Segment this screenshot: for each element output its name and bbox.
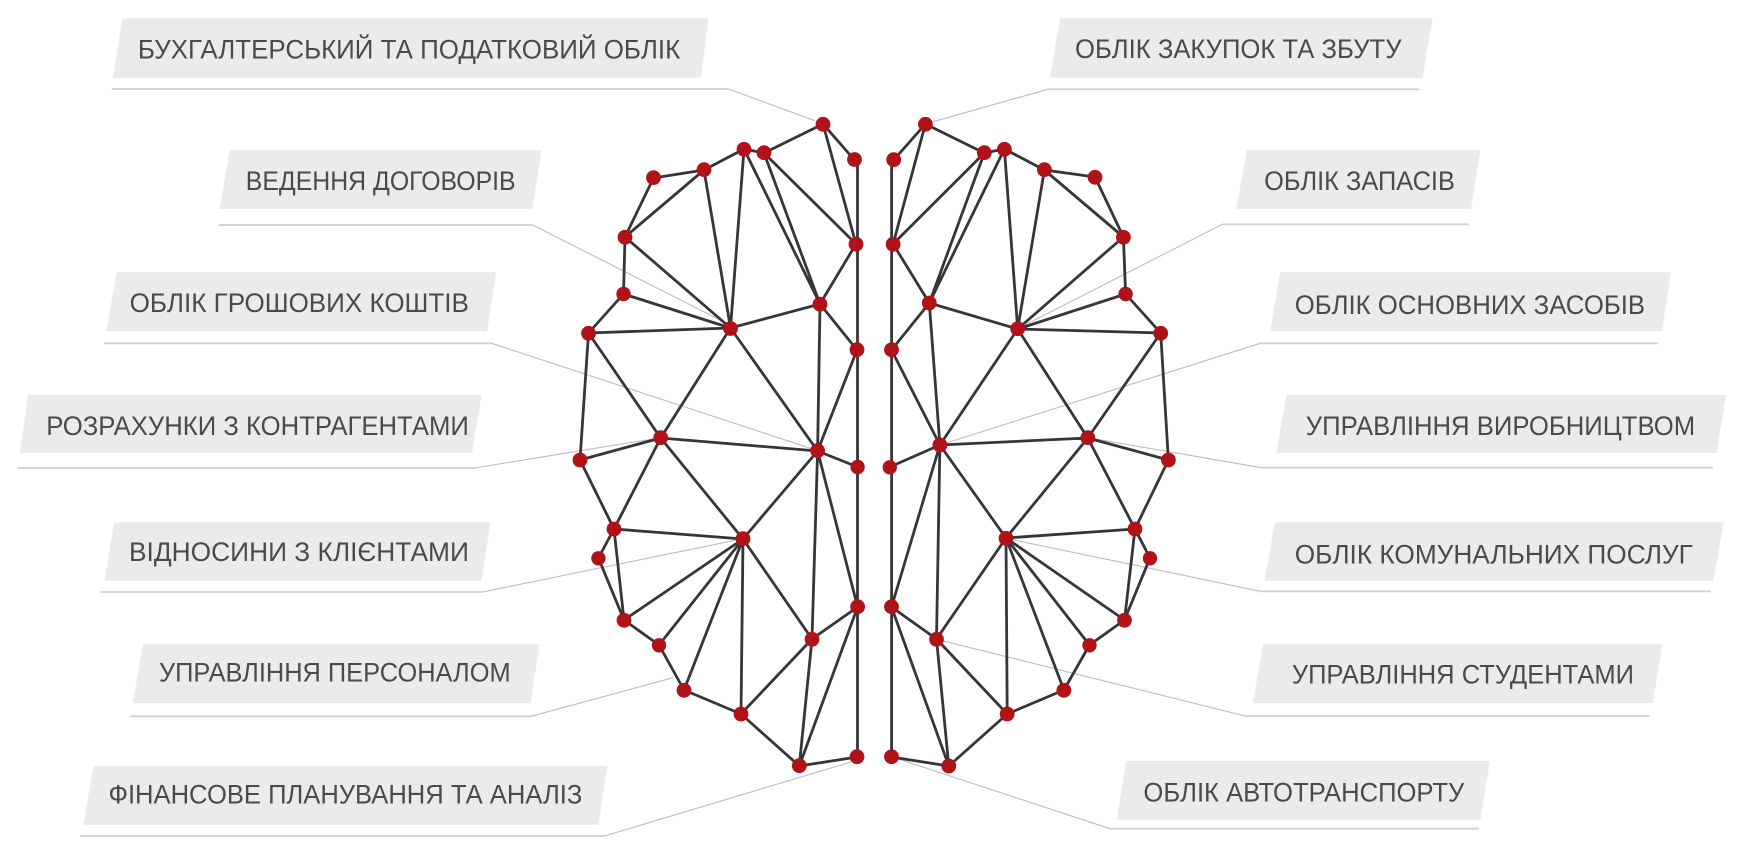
label: РОЗРАХУНКИ З КОНТРАГЕНТАМИ: РОЗРАХУНКИ З КОНТРАГЕНТАМИ: [46, 411, 469, 441]
label: ОБЛІК КОМУНАЛЬНИХ ПОСЛУГ: [1006, 522, 1724, 591]
label: ФІНАНСОВЕ ПЛАНУВАННЯ ТА АНАЛІЗ: [80, 762, 851, 836]
nodes: right half: [883, 117, 1176, 773]
label: УПРАВЛІННЯ ПЕРСОНАЛОМ: УПРАВЛІННЯ ПЕРСОНАЛОМ: [159, 657, 511, 687]
label: УПРАВЛІННЯ СТУДЕНТАМИ: [936, 639, 1662, 716]
label: ОБЛІК ОСНОВНИХ ЗАСОБІВ: [940, 272, 1671, 445]
label: УПРАВЛІННЯ ПЕРСОНАЛОМ: [130, 644, 673, 716]
label: ФІНАНСОВЕ ПЛАНУВАННЯ ТА АНАЛІЗ: ФІНАНСОВЕ ПЛАНУВАННЯ ТА АНАЛІЗ: [108, 780, 582, 810]
label: ОБЛІК ЗАПАСІВ: [1025, 150, 1480, 325]
label: ВЕДЕННЯ ДОГОВОРІВ: [219, 150, 726, 323]
label: УПРАВЛІННЯ СТУДЕНТАМИ: УПРАВЛІННЯ СТУДЕНТАМИ: [1292, 660, 1634, 690]
label: ВІДНОСИНИ З КЛІЄНТАМИ: [101, 522, 743, 592]
nodes: left half: [573, 117, 865, 773]
label: ВЕДЕННЯ ДОГОВОРІВ: ВЕДЕННЯ ДОГОВОРІВ: [246, 166, 516, 196]
network: right half of heart: [883, 117, 1176, 773]
label: БУХГАЛТЕРСЬКИЙ ТА ПОДАТКОВИЙ ОБЛІК: [112, 18, 815, 121]
label: ОБЛІК ЗАКУПОК ТА ЗБУТУ: [933, 18, 1433, 122]
label: ОБЛІК ЗАКУПОК ТА ЗБУТУ: ОБЛІК ЗАКУПОК ТА ЗБУТУ: [1075, 34, 1402, 64]
label: ВІДНОСИНИ З КЛІЄНТАМИ: ВІДНОСИНИ З КЛІЄНТАМИ: [129, 537, 469, 567]
label: ОБЛІК ГРОШОВИХ КОШТІВ: ОБЛІК ГРОШОВИХ КОШТІВ: [130, 288, 469, 318]
label: ОБЛІК АВТОТРАНСПОРТУ: [892, 757, 1490, 829]
label: БУХГАЛТЕРСЬКИЙ ТА ПОДАТКОВИЙ ОБЛІК: БУХГАЛТЕРСЬКИЙ ТА ПОДАТКОВИЙ ОБЛІК: [138, 33, 680, 64]
label: УПРАВЛІННЯ ВИРОБНИЦТВОМ: УПРАВЛІННЯ ВИРОБНИЦТВОМ: [1306, 411, 1695, 441]
label: РОЗРАХУНКИ З КОНТРАГЕНТАМИ: [18, 395, 661, 468]
label: ОБЛІК ГРОШОВИХ КОШТІВ: [104, 272, 818, 451]
label: ОБЛІК КОМУНАЛЬНИХ ПОСЛУГ: ОБЛІК КОМУНАЛЬНИХ ПОСЛУГ: [1295, 539, 1693, 569]
label: ОБЛІК АВТОТРАНСПОРТУ: ОБЛІК АВТОТРАНСПОРТУ: [1143, 777, 1465, 807]
label: ОБЛІК ЗАПАСІВ: ОБЛІК ЗАПАСІВ: [1264, 166, 1455, 196]
label: УПРАВЛІННЯ ВИРОБНИЦТВОМ: [1088, 395, 1726, 468]
label: ОБЛІК ОСНОВНИХ ЗАСОБІВ: ОБЛІК ОСНОВНИХ ЗАСОБІВ: [1295, 290, 1645, 320]
network: left half of heart: [573, 117, 865, 773]
